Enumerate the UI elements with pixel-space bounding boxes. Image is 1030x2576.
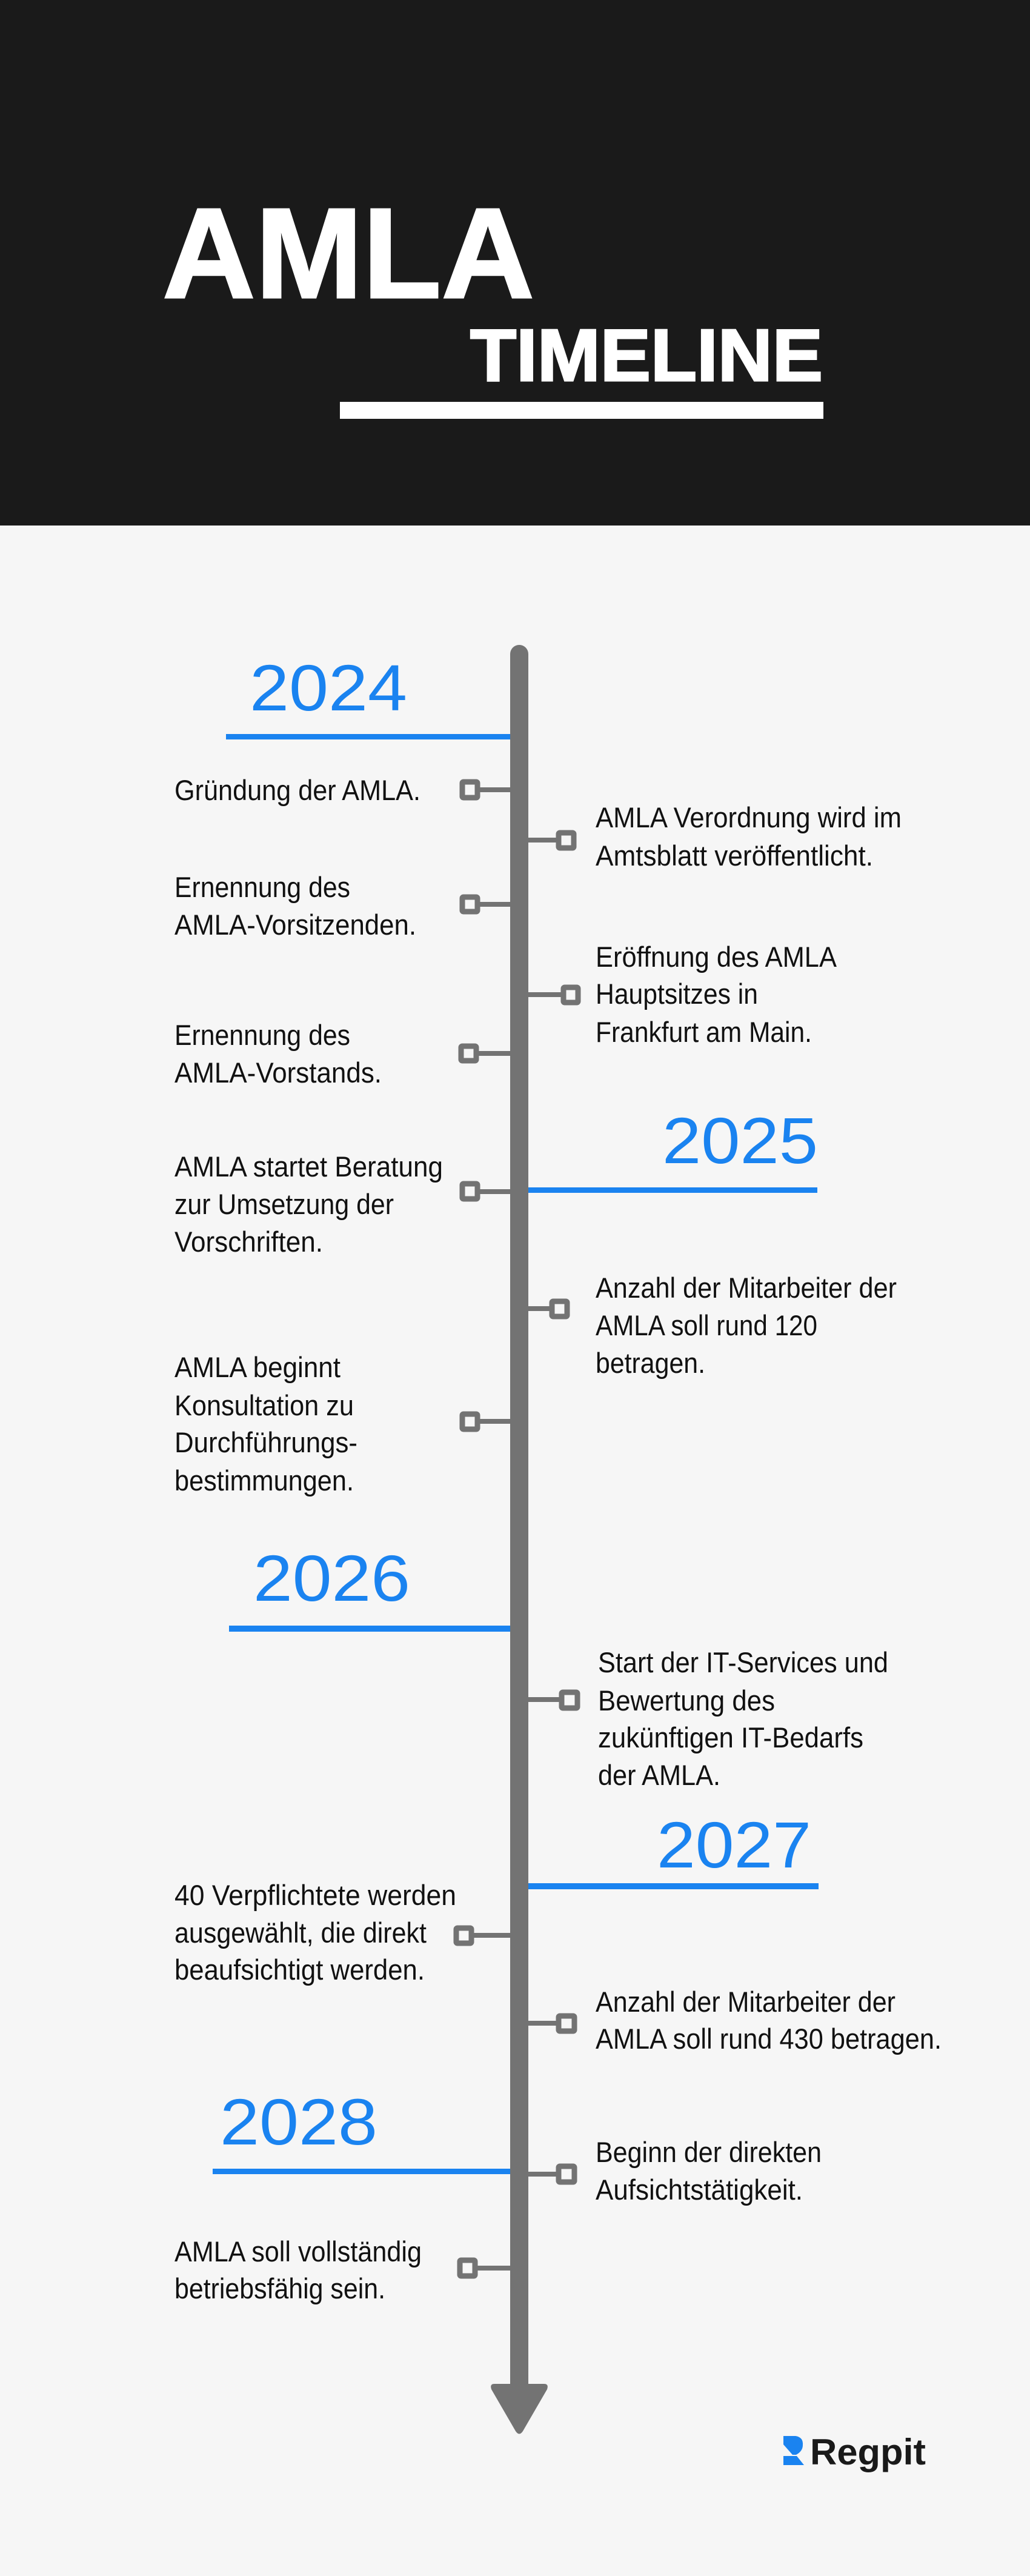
event: AMLA vollständig betriebsfähig — [174, 2235, 510, 2304]
year 2025 — [528, 1104, 818, 1193]
event: Start der IT-Services: zukünftigen IT-Bedarfs — [598, 1721, 863, 1753]
event: Anzahl der Mitarbeiter 430 — [528, 1986, 942, 2055]
event: 40 Verpflichtete: beaufsichtigt werden. — [174, 1954, 425, 1986]
event: Ernennung des AMLA-Vorstands: AMLA-Vorstands. — [174, 1056, 382, 1089]
event: Gründung der AMLA: Gründung der AMLA. — [174, 774, 420, 806]
event: Ernennung des AMLA-Vorsitzenden: AMLA-Vorsitzenden. — [174, 909, 416, 941]
event: Eröffnung des Hauptsitzes: Frankfurt am Main. — [596, 1016, 812, 1048]
event: Anzahl der Mitarbeiter 120: betragen. — [596, 1347, 705, 1379]
event: Eröffnung des Hauptsitzes — [528, 941, 837, 1048]
event: Ernennung des AMLA-Vorstands: Ernennung des — [174, 1019, 350, 1051]
event: AMLA beginnt Konsultation: AMLA beginnt — [174, 1351, 341, 1383]
event: Anzahl der Mitarbeiter 430: AMLA soll rund 430 betragen. — [596, 2023, 942, 2055]
year 2027 — [528, 1808, 819, 1889]
event: AMLA beginnt Konsultation: bestimmungen. — [174, 1464, 354, 1497]
event: AMLA Verordnung: Amtsblatt veröffentlicht. — [596, 839, 873, 872]
event: Ernennung des AMLA-Vorstands — [174, 1019, 510, 1089]
event: Start der IT-Services: Bewertung des — [598, 1684, 775, 1717]
year 2028: 2028 — [220, 2085, 377, 2158]
year 2024 — [226, 651, 510, 739]
event: Anzahl der Mitarbeiter 430: Anzahl der Mitarbeiter der — [596, 1986, 895, 2018]
event: AMLA Verordnung: AMLA Verordnung wird im — [596, 801, 902, 833]
event: Anzahl der Mitarbeiter 120: Anzahl der Mitarbeiter der — [596, 1272, 897, 1304]
title underline bar — [340, 402, 823, 419]
logo: Regpit: Regpit — [810, 2432, 926, 2472]
year 2027: 2027 — [657, 1808, 811, 1881]
subtitle: TIMELINE: TIMELINE — [470, 314, 823, 396]
event: 40 Verpflichtete — [174, 1879, 510, 1986]
event: Ernennung des AMLA-Vorsitzenden: Ernennung des — [174, 871, 350, 903]
event: Start der IT-Services: der AMLA. — [598, 1759, 720, 1791]
event: 40 Verpflichtete: 40 Verpflichtete werden — [174, 1879, 456, 1911]
event: Beginn der direkten Aufsichtstätigkeit — [528, 2136, 822, 2206]
event: Start der IT-Services — [528, 1646, 888, 1791]
year 2028 — [213, 2085, 510, 2174]
timeline arrow — [491, 645, 548, 2434]
event: AMLA startet Beratung: zur Umsetzung der — [174, 1188, 394, 1220]
header banner — [0, 0, 1030, 526]
event: AMLA vollständig betriebsfähig: AMLA soll vollständig — [174, 2235, 422, 2267]
year 2026: 2026 — [253, 1541, 410, 1615]
event: Eröffnung des Hauptsitzes: Eröffnung des AMLA — [596, 941, 837, 973]
event: AMLA beginnt Konsultation: Konsultation zu — [174, 1389, 354, 1421]
event: AMLA beginnt Konsultation — [174, 1351, 510, 1497]
event: AMLA vollständig betriebsfähig: betriebsfähig sein. — [174, 2272, 385, 2304]
event: Anzahl der Mitarbeiter 120 — [528, 1272, 897, 1379]
event: Beginn der direkten Aufsichtstätigkeit: Aufsichtstätigkeit. — [596, 2174, 803, 2206]
year 2024: 2024 — [250, 651, 407, 724]
year 2026 — [229, 1541, 510, 1632]
event: Eröffnung des Hauptsitzes: Hauptsitzes in — [596, 978, 758, 1010]
event: AMLA startet Beratung: Vorschriften. — [174, 1226, 323, 1258]
event: 40 Verpflichtete: ausgewählt, die direkt — [174, 1917, 427, 1949]
event: AMLA startet Beratung — [174, 1150, 510, 1258]
event: Beginn der direkten Aufsichtstätigkeit: Beginn der direkten — [596, 2136, 822, 2168]
event: Anzahl der Mitarbeiter 120: AMLA soll rund 120 — [596, 1309, 817, 1341]
event: AMLA Verordnung — [528, 801, 902, 872]
title: AMLA: AMLA — [162, 181, 534, 325]
event: AMLA startet Beratung: AMLA startet Beratung — [174, 1150, 443, 1183]
event: Start der IT-Services: Start der IT-Services und — [598, 1646, 888, 1678]
event: AMLA beginnt Konsultation: Durchführungs- — [174, 1426, 357, 1458]
event: Ernennung des AMLA-Vorsitzenden — [174, 871, 510, 941]
year 2025: 2025 — [662, 1104, 818, 1177]
